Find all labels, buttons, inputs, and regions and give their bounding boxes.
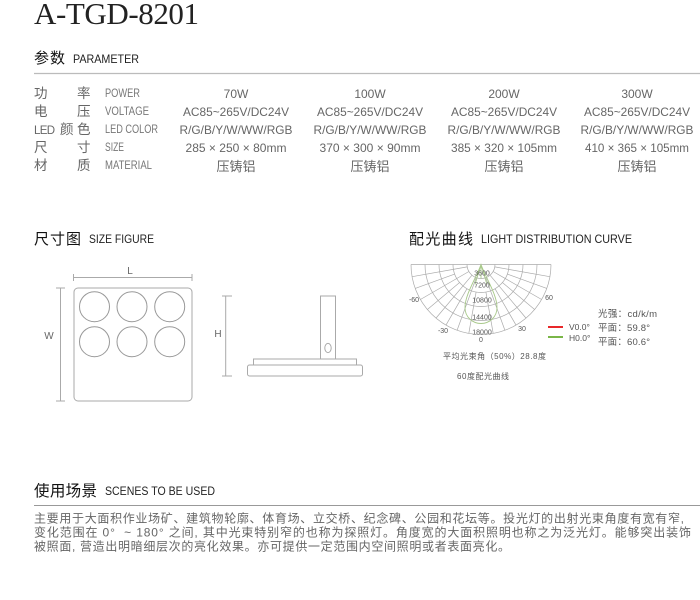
column 100W: AC85~265V/DC24V bbox=[317, 105, 423, 119]
column 100W: 压铸铝 bbox=[350, 159, 390, 174]
row labels english bbox=[105, 88, 158, 172]
scenes description: 主要用于大面积作业场矿、建筑物轮廓、体育场、立交桥、纪念碑、公园和花坛等。投光灯的出射光束角度有宽有窄, bbox=[34, 510, 684, 526]
row labels chinese: 颜 bbox=[60, 122, 74, 137]
row labels chinese: 率 bbox=[77, 85, 90, 101]
row labels chinese: 材 bbox=[34, 158, 48, 173]
column 200W: AC85~265V/DC24V bbox=[451, 105, 557, 119]
chart readings: 平面：59.8° bbox=[598, 323, 650, 334]
row labels chinese: 压 bbox=[77, 104, 90, 119]
heading: scenes: SCENES TO BE USED bbox=[105, 484, 215, 498]
chart readings bbox=[598, 308, 657, 348]
polar chart bbox=[409, 264, 553, 344]
column 300W: R/G/B/Y/W/WW/RGB bbox=[580, 123, 694, 137]
scale labels: 0 bbox=[479, 337, 483, 344]
row labels english: LED COLOR bbox=[105, 124, 158, 136]
W dimension bbox=[56, 288, 65, 401]
spokes bbox=[412, 267, 550, 333]
scale labels: 18000 bbox=[472, 330, 492, 336]
scale labels: -30 bbox=[438, 328, 448, 335]
column 200W: 200W bbox=[488, 87, 520, 101]
heading: size figure: 尺寸图 bbox=[34, 231, 81, 248]
chart readings: 平面：60.6° bbox=[598, 337, 650, 348]
heading: scenes: 使用场景 bbox=[34, 482, 97, 500]
row labels english: MATERIAL bbox=[105, 160, 152, 172]
chart caption: curve: 60度配光曲线 bbox=[457, 371, 509, 381]
heading: light distribution curve: 配光曲线 bbox=[409, 231, 473, 248]
heading: scenes bbox=[34, 482, 215, 500]
scale labels: 10800 bbox=[472, 298, 492, 304]
scenes description: 被照面, 营造出明暗细层次的亮化效果。亦可提供一定范围内空间照明或者表面亮化。 bbox=[34, 538, 510, 554]
column 70W: 压铸铝 bbox=[216, 159, 256, 174]
size figure: front view: W bbox=[44, 331, 54, 342]
heading: size figure: SIZE FIGURE bbox=[89, 232, 154, 246]
column 200W: 385 × 320 × 105mm bbox=[451, 141, 557, 155]
scale labels: -60 bbox=[409, 297, 419, 304]
column 70W: R/G/B/Y/W/WW/RGB bbox=[180, 123, 292, 137]
column 200W: R/G/B/Y/W/WW/RGB bbox=[448, 123, 560, 137]
column 300W: 300W bbox=[621, 87, 653, 101]
size figure: side view bbox=[214, 296, 362, 376]
grid arcs bbox=[411, 264, 551, 334]
column 70W bbox=[180, 87, 292, 174]
row labels chinese: 质 bbox=[77, 158, 90, 173]
heading: parameter bbox=[34, 50, 139, 67]
row labels english: POWER bbox=[105, 88, 140, 100]
column 70W: 70W bbox=[224, 87, 249, 101]
chart legend: H0.0° bbox=[569, 333, 590, 343]
row labels chinese: 尺 bbox=[34, 140, 48, 155]
size figure: front view: L bbox=[127, 266, 133, 277]
scale labels: 7200 bbox=[474, 282, 490, 290]
size figure: side view: H bbox=[214, 329, 222, 340]
column 100W bbox=[314, 87, 426, 174]
scale labels bbox=[409, 270, 553, 344]
row labels chinese: 功 bbox=[34, 86, 48, 101]
chart legend: V0.0° bbox=[569, 322, 590, 332]
green curve bbox=[465, 264, 497, 324]
column 200W: 压铸铝 bbox=[484, 159, 524, 174]
column 300W: AC85~265V/DC24V bbox=[584, 105, 690, 119]
column 100W: 100W bbox=[354, 87, 386, 101]
H dimension bbox=[222, 296, 232, 376]
row labels chinese bbox=[34, 85, 90, 173]
row labels chinese: 寸 bbox=[77, 140, 90, 155]
size figure: front view bbox=[44, 266, 192, 401]
row labels english: VOLTAGE bbox=[105, 106, 149, 118]
scenes description bbox=[34, 510, 691, 554]
parameter table bbox=[34, 85, 694, 174]
column 300W: 410 × 365 × 105mm bbox=[585, 141, 689, 155]
heading: light distribution curve bbox=[409, 231, 632, 248]
column 70W: 285 × 250 × 80mm bbox=[186, 141, 287, 155]
row labels chinese: LED bbox=[34, 125, 55, 137]
column 100W: 370 × 300 × 90mm bbox=[320, 141, 421, 155]
scale labels: 30 bbox=[518, 326, 526, 333]
row labels chinese: 电 bbox=[34, 104, 48, 119]
lamp circles bbox=[80, 292, 185, 357]
heading: parameter: PARAMETER bbox=[73, 52, 139, 66]
bracket bbox=[320, 296, 336, 359]
heading: parameter: 参数 bbox=[34, 50, 65, 67]
housing bbox=[74, 288, 192, 401]
column 200W bbox=[448, 87, 560, 174]
scale labels: 60 bbox=[545, 295, 553, 302]
chart legend bbox=[548, 322, 590, 343]
plates bbox=[254, 359, 356, 365]
chart readings: 光强：cd/k/m bbox=[598, 308, 657, 320]
heading: size figure bbox=[34, 231, 154, 248]
column 300W bbox=[580, 87, 694, 174]
column 100W: R/G/B/Y/W/WW/RGB bbox=[314, 123, 426, 137]
scale labels: 14400 bbox=[472, 314, 492, 322]
heading: light distribution curve: LIGHT DISTRIBUTION CURVE bbox=[481, 232, 632, 246]
chart caption: beam angle: 平均光束角（50%）28.8度 bbox=[443, 351, 546, 361]
L dimension bbox=[74, 274, 192, 281]
scale labels: 3600 bbox=[474, 270, 490, 278]
scenes description: 变化范围在 0° ~ 180° 之间, 其中光束特别窄的也称为探照灯。角度宽的大面积照明也称之为泛光灯。能够突出装饰 bbox=[34, 524, 691, 540]
column 70W: AC85~265V/DC24V bbox=[183, 105, 289, 119]
row labels chinese: 色 bbox=[77, 121, 90, 137]
column 300W: 压铸铝 bbox=[617, 159, 657, 174]
row labels english: SIZE bbox=[105, 142, 124, 154]
